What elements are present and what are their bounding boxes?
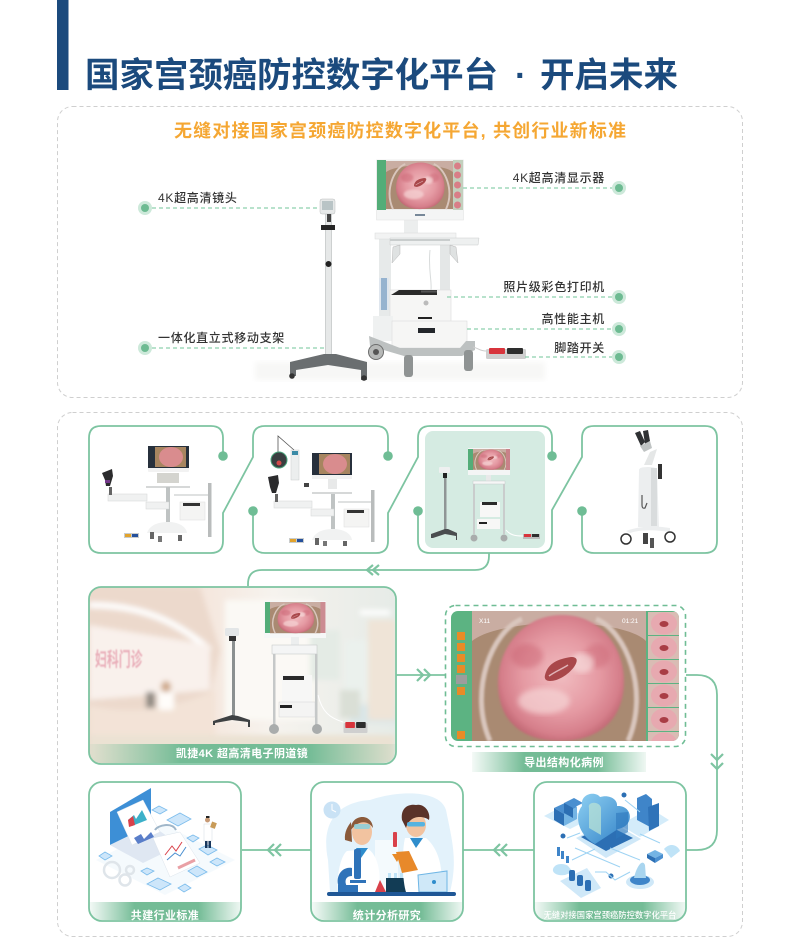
banner: export structured cases: 导出结构化病例 — [524, 755, 604, 769]
connector: products to main device — [248, 553, 489, 586]
platform illustration — [544, 792, 680, 898]
panel: workflow — [58, 412, 742, 936]
banner — [534, 902, 685, 921]
card: industry standards — [89, 782, 241, 922]
floor shadow — [255, 362, 545, 380]
label: photo printer — [447, 279, 626, 304]
thumbnails — [646, 611, 679, 741]
card: statistical research: 统计分析研究 — [353, 908, 421, 922]
title: 国家宫颈癌防控数字化平台 — [85, 57, 498, 95]
product card outlines — [89, 426, 717, 553]
zoom and timer readouts — [479, 618, 638, 623]
highlighted product background — [425, 431, 545, 548]
device in scene: cart and monitor — [264, 601, 343, 734]
card: clinic scene with colposcope — [89, 587, 398, 764]
sidebar — [451, 611, 472, 741]
card: clinic scene with colposcope: 凯捷4K 超高清电子阴道镜 — [176, 746, 308, 760]
device in scene: stand — [213, 628, 250, 727]
panel: device overview — [58, 106, 742, 398]
research illustration — [324, 793, 456, 896]
label: 4K monitor: 4K超高清显示器 — [513, 170, 605, 185]
device: monitor — [376, 160, 464, 220]
title: · — [515, 57, 526, 95]
connector: platform to research — [463, 844, 534, 856]
card: statistical research — [311, 782, 463, 922]
label: mobile stand — [138, 330, 326, 355]
card: digital platform: 无缝对接国家宫颈癌防控数字化平台 — [544, 910, 676, 920]
connector: device to case export — [396, 669, 445, 681]
label: mobile stand: 一体化直立式移动支架 — [158, 330, 285, 345]
label: 4K monitor — [463, 170, 626, 195]
standards illustration — [96, 788, 235, 895]
product 4: binocular colposcope — [621, 430, 675, 548]
banner — [89, 902, 241, 921]
device: foot pedal — [486, 348, 526, 359]
label: host — [467, 311, 626, 336]
label: photo printer: 照片级彩色打印机 — [503, 279, 605, 294]
connector: cases to platform — [686, 675, 723, 850]
banner — [312, 902, 463, 921]
label: foot switch: 脚踏开关 — [554, 340, 605, 355]
subtitle: 无缝对接国家宫颈癌防控数字化平台, 共创行业新标准 — [174, 120, 626, 141]
connector: research to standards — [242, 844, 311, 856]
product 2: colposcope with laser — [268, 436, 374, 546]
title accent bar — [57, 0, 68, 90]
card: digital platform — [534, 782, 686, 921]
product 3: 4K electronic colposcope — [431, 448, 540, 542]
device: colposcope cart — [368, 219, 486, 377]
label: host: 高性能主机 — [541, 311, 605, 326]
card: colposcopy software screen — [446, 606, 686, 755]
label: 4K lens: 4K超高清镜头 — [158, 190, 238, 205]
label: 4K lens — [138, 190, 320, 215]
title: 开启未来 — [540, 57, 678, 95]
banner: product name — [89, 744, 395, 764]
label: foot switch — [525, 340, 626, 364]
product 1: colposcope with arm — [102, 446, 212, 542]
device in scene: pedal — [344, 722, 368, 733]
title — [85, 57, 678, 95]
banner: export structured cases — [472, 752, 646, 772]
zoom and timer readouts: 01:21 — [622, 618, 639, 625]
device: mobile colposcope stand — [289, 199, 367, 381]
sign: gynecology clinic: 妇科门诊 — [95, 648, 143, 671]
card: industry standards: 共建行业标准 — [131, 908, 199, 922]
zoom and timer readouts: X11 — [479, 618, 490, 625]
